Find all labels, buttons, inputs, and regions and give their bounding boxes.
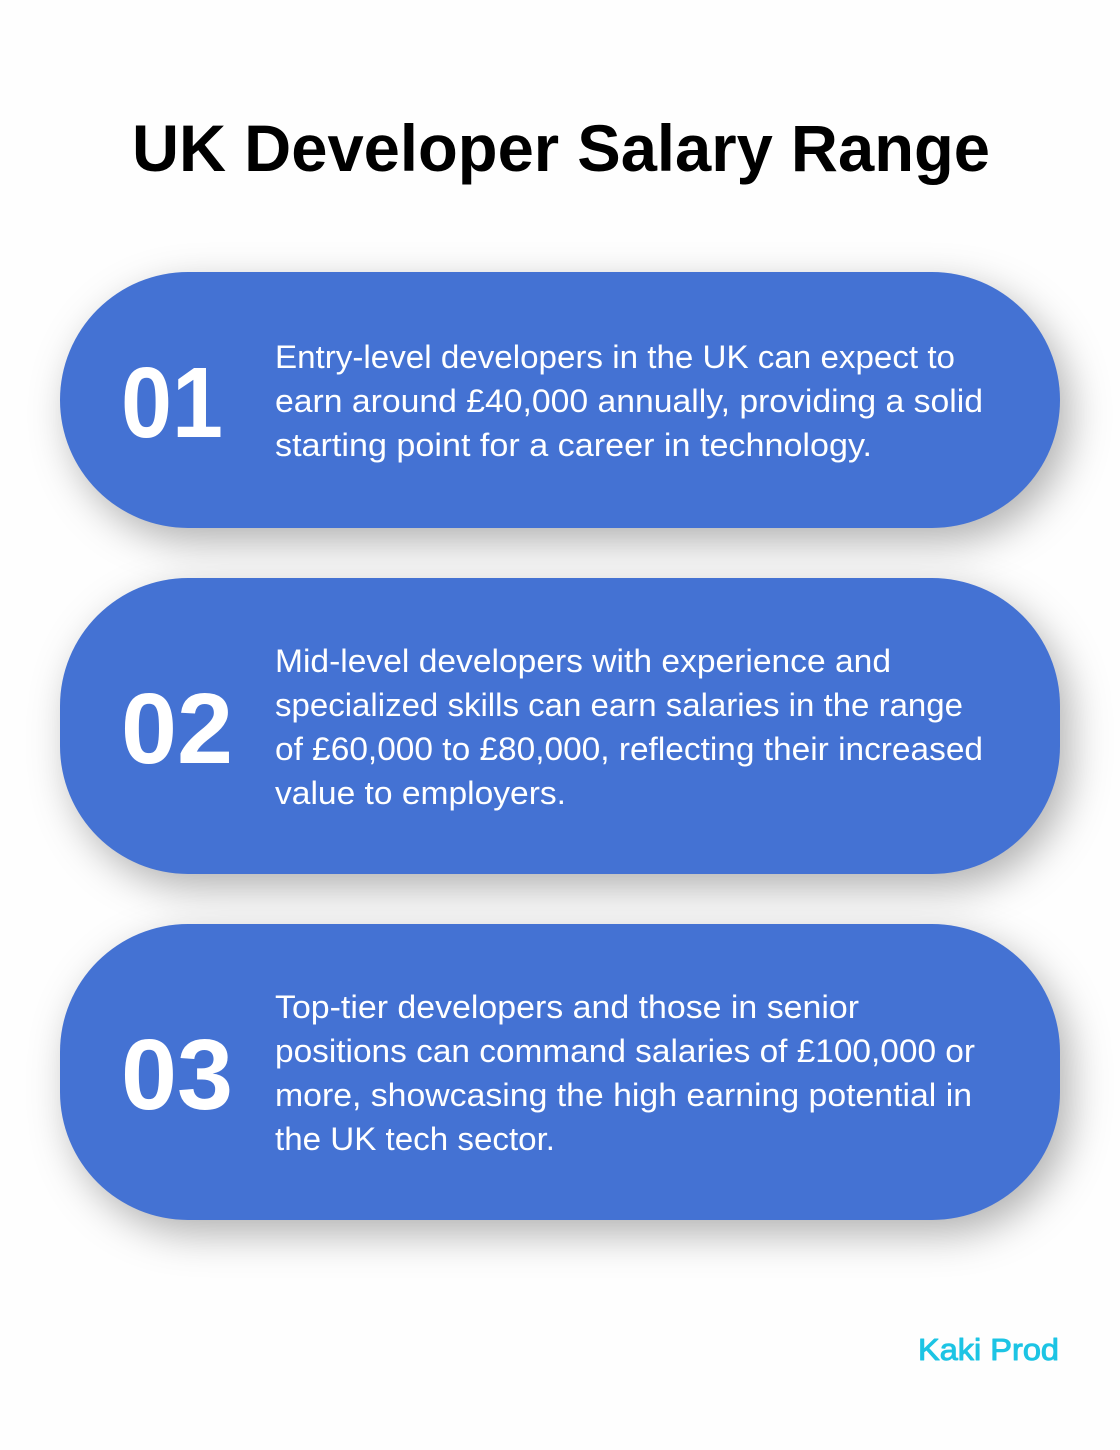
panel: entry-level salary <box>60 272 1060 528</box>
panel: mid-level salary <box>60 578 1060 874</box>
text block: mid-level: of £60,000 to £80,000, reflecting their increased <box>275 731 983 767</box>
panel: top-tier salary <box>60 924 1060 1220</box>
logo: Kaki Prod: Kaki Prod <box>918 1332 1059 1367</box>
text block: mid-level: Mid-level developers with experience and <box>275 643 891 679</box>
text block: mid-level <box>275 643 983 811</box>
text block: mid-level: specialized skills can earn salaries in the range <box>275 687 963 723</box>
panel background <box>60 272 1060 528</box>
text block: entry-level: Entry-level developers in the UK can expect to <box>275 339 955 375</box>
step number 02: 02 <box>121 673 233 785</box>
title: UK Developer Salary Range <box>132 111 990 185</box>
step number 01: 01 <box>121 347 223 459</box>
step number 03: 03 <box>121 1019 233 1131</box>
text block: entry-level: starting point for a career in technology. <box>275 427 872 463</box>
text block: top-tier: positions can command salaries of £100,000 or <box>275 1033 975 1069</box>
panel background <box>60 578 1060 874</box>
panel background <box>60 924 1060 1220</box>
text block: entry-level <box>275 339 983 463</box>
text block: entry-level: earn around £40,000 annually, providing a solid <box>275 383 983 419</box>
text block: top-tier: the UK tech sector. <box>275 1121 555 1157</box>
text block: top-tier: Top-tier developers and those in senior <box>275 989 859 1025</box>
text block: mid-level: value to employers. <box>275 775 566 811</box>
text block: top-tier: more, showcasing the high earning potential in <box>275 1077 972 1113</box>
text block: top-tier <box>275 989 975 1157</box>
